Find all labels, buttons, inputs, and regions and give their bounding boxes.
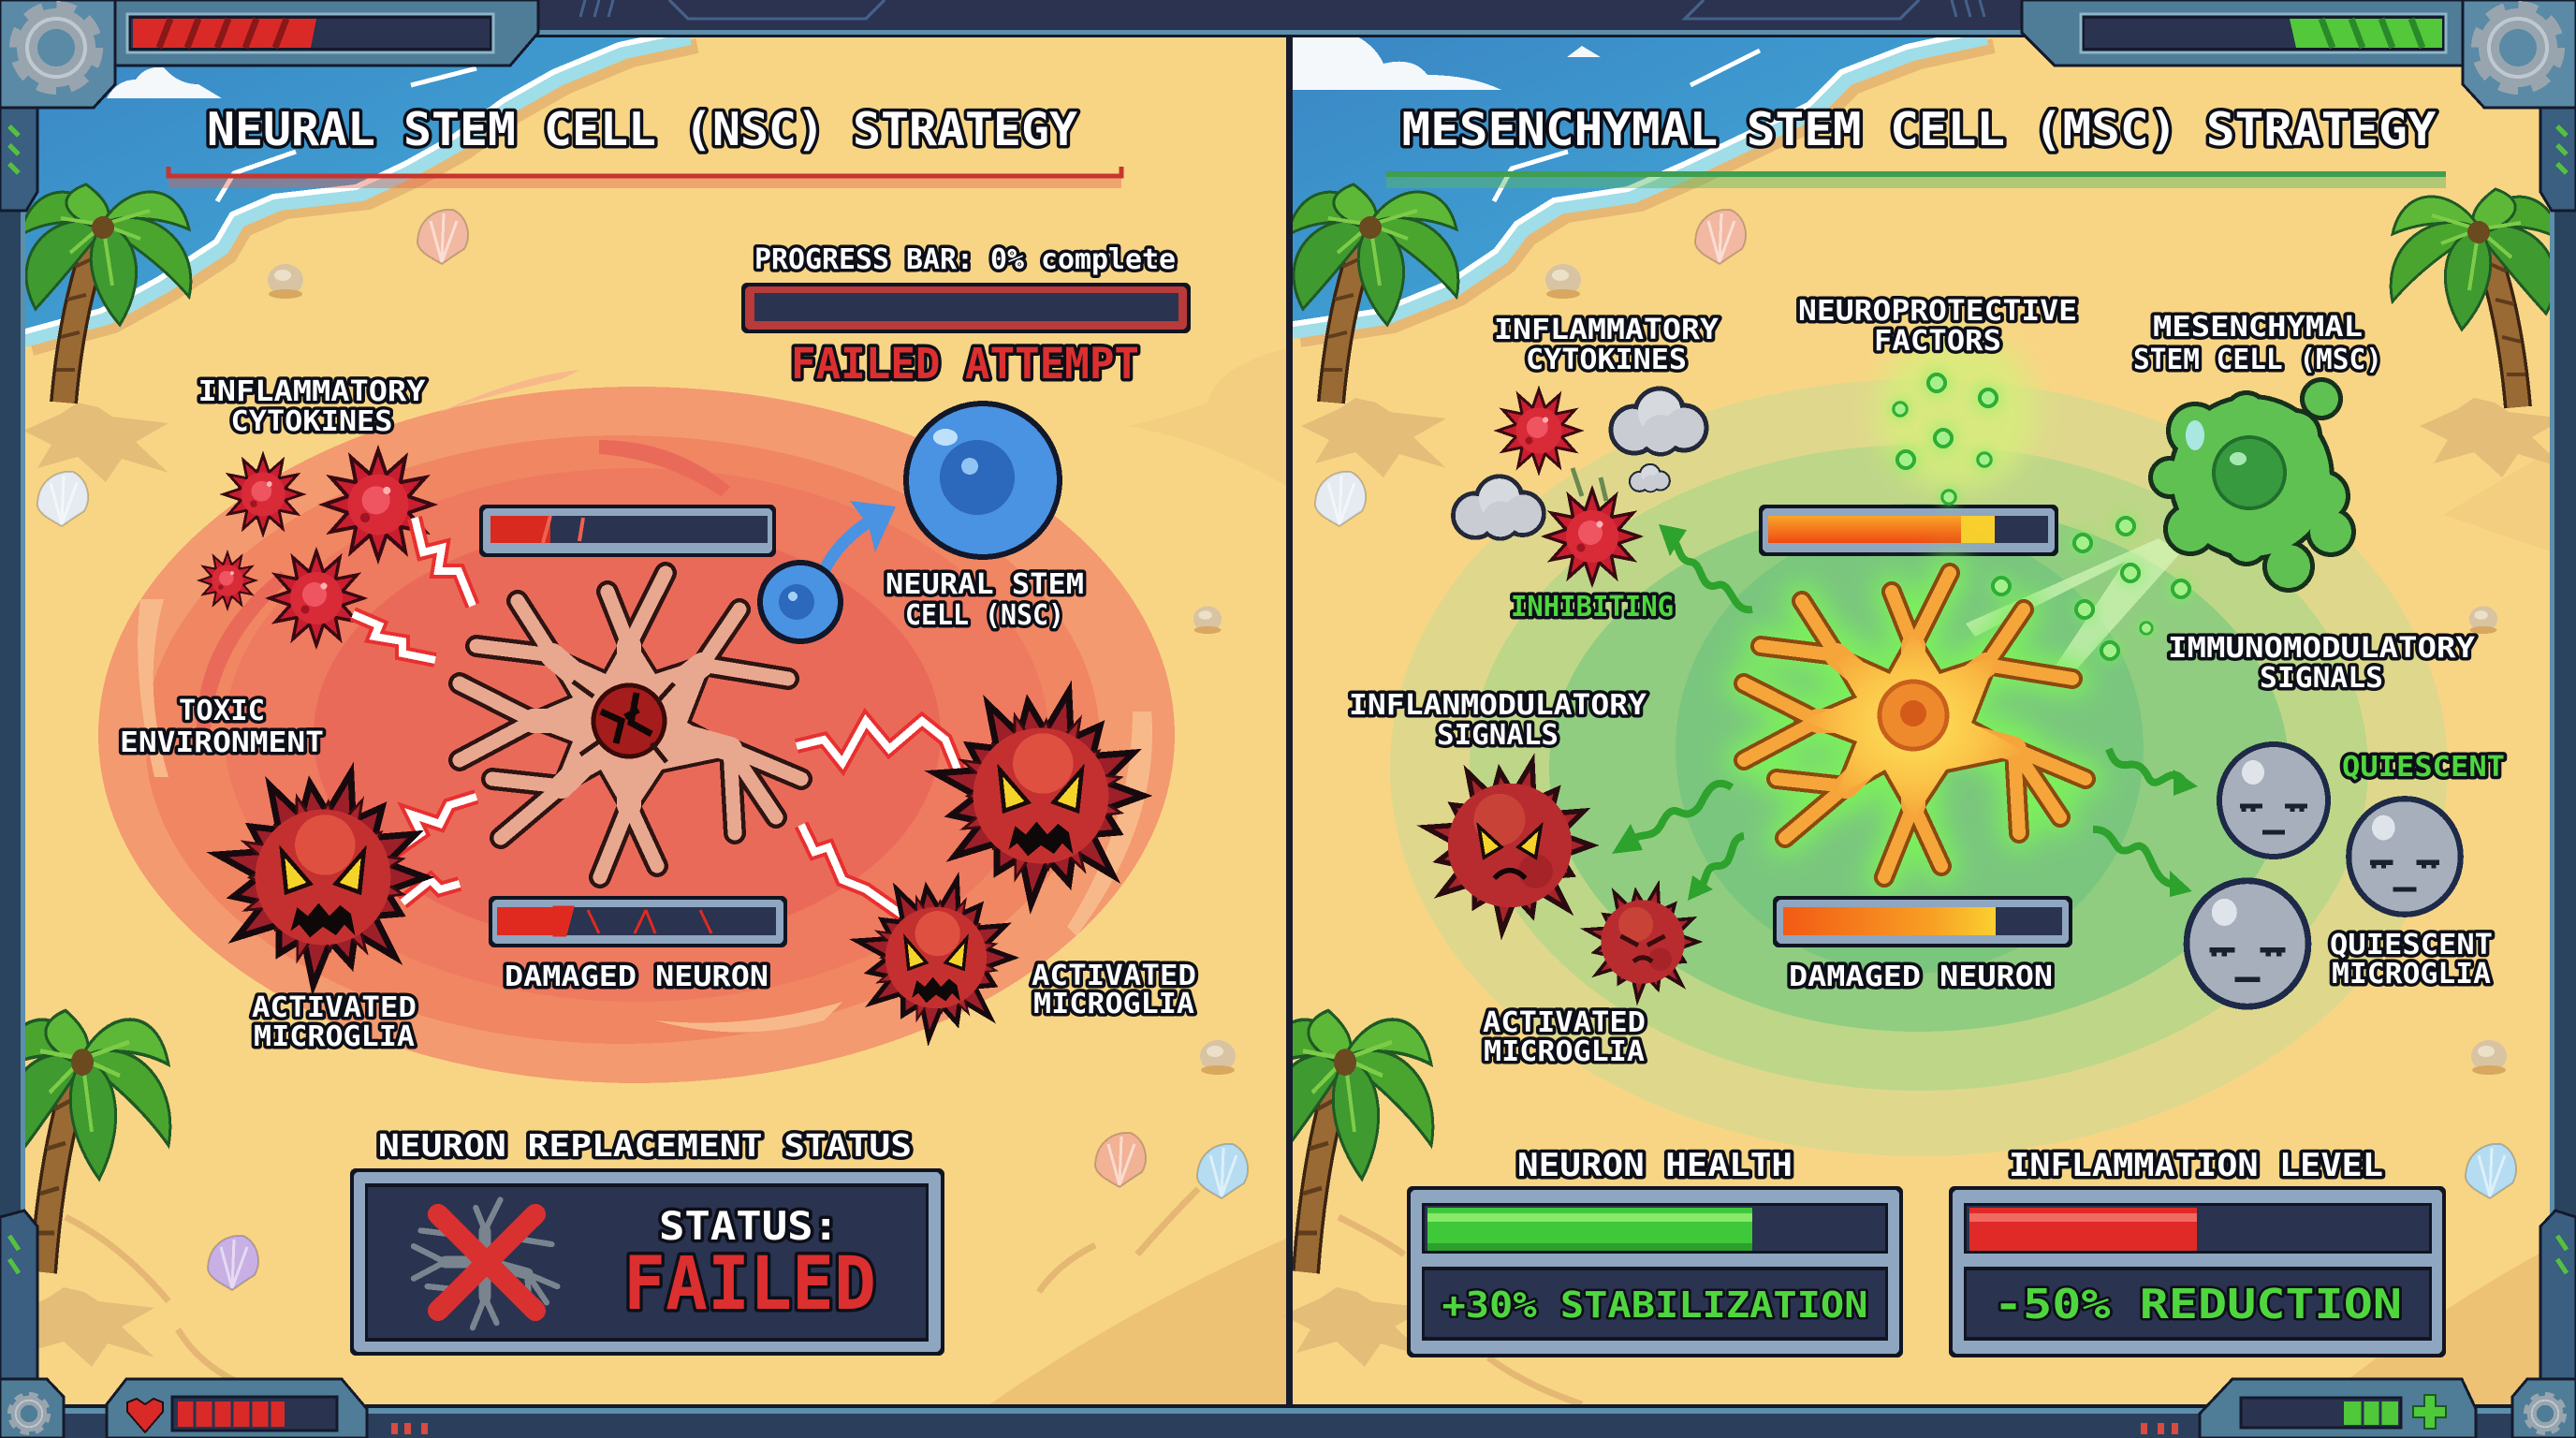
label: inflanmodulatory signals [1349,689,1647,752]
label: activated microglia left: MICROGLIA [254,1020,415,1053]
label: toxic environment [120,695,324,759]
label: activated microglia [1483,1006,1646,1068]
label: inflanmodulatory signals: INFLANMODULATORY [1349,689,1647,722]
arrow and small stem cell [760,501,896,641]
title: MSC: MESENCHYMAL STEM CELL (MSC) STRATEGY [1402,103,2437,156]
label: immunomodulatory signals: SIGNALS [2260,662,2383,695]
frame: left rail [0,106,37,1407]
label: inflammatory cytokines [1494,314,1719,376]
dunes: left beach [66,348,1288,1407]
title: NSC: NEURAL STEM CELL (NSC) STRATEGY [207,103,1078,156]
label: neural stem cell: CELL (NSC) [905,599,1064,632]
label: neuroprotective factors [1798,295,2077,358]
label: toxic environment: TOXIC [179,695,265,727]
panel: MSC strategy scene [1263,31,2565,1407]
label: immunomodulatory signals [2168,632,2475,695]
label: failed attempt: FAILED ATTEMPT [791,339,1139,389]
label: inflammatory cytokines: INFLAMMATORY [198,375,425,408]
palm tree: lower left [0,1010,170,1272]
label: neuroprotective factors: NEUROPROTECTIVE [1798,295,2077,328]
particles: immunomodulatory signals [1987,512,2195,665]
ocean: right beach [1287,31,1994,340]
label: inflanmodulatory signals: SIGNALS [1437,719,1559,752]
title underline: green [1386,171,2446,188]
beams: MSC to neuron [1966,538,2181,683]
panel: inflammation meter [1949,1186,2446,1357]
shells and stones: left beach [37,210,1248,1290]
HUD: top left red meter [115,0,538,66]
panel: neuron health meter [1407,1186,1903,1357]
label: neural stem cell: NEURAL STEM [886,568,1084,601]
icons: quiescent microglia [2187,744,2461,1006]
clouds: right beach [1293,37,1601,90]
health bar: upper damaged [479,505,776,557]
toxic red swirl environment [98,370,1175,1083]
text: failed: FAILED [623,1242,876,1327]
arrowheads: to microglia [1612,824,1713,901]
icon: mesenchymal stem cell [2153,382,2351,588]
label: inflammation level: INFLAMMATION LEVEL [2009,1147,2383,1184]
icon: activated microglia right [935,691,1143,903]
HUD: bottom left health [107,1379,367,1438]
label: inflammatory cytokines [198,375,425,438]
label: neuron replacement status: NEURON REPLACEMENT STATUS [378,1127,912,1164]
icon: activated microglia left [217,772,425,985]
icon: activated microglia small [857,880,1013,1038]
health bar: lower damaged [489,896,787,947]
title underline: red [168,167,1121,188]
shells and stones: right beach [1315,210,2516,1198]
label: inflammatory cytokines: INFLAMMATORY [1494,314,1719,346]
neuron glow [1744,573,2086,877]
palm tree: upper right [2391,189,2561,407]
text: reduction value: -50% REDUCTION [1994,1281,2402,1328]
panel: NSC strategy scene [0,31,1288,1407]
health bar: neuron upper [1759,505,2058,556]
arrows: signals to quiescent [2093,749,2186,885]
arrowheads: to quiescent [2170,770,2198,897]
label: mesenchymal stem cell [2133,311,2382,376]
HUD: bottom right green meter [2200,1379,2476,1438]
health bar: neuron lower [1773,896,2072,947]
cloud: left beach [107,67,222,98]
label: neuron health: NEURON HEALTH [1517,1147,1793,1184]
panel: status failed [350,1168,944,1356]
icon: red X [438,1214,535,1311]
label: progress bar: PROGRESS BAR: 0% complete [754,243,1176,276]
particles: neuroprotective factors [1889,369,2002,508]
text: status: STATUS: [659,1203,839,1249]
label: neural stem cell [886,568,1084,632]
dunes: right beach [1339,449,2553,1407]
HUD: top right gear box [2463,0,2576,108]
label: toxic environment: ENVIRONMENT [120,726,324,759]
label: activated microglia left [252,991,417,1053]
central divider [1286,34,1293,1410]
label: mesenchymal stem cell: MESENCHYMAL [2153,311,2363,344]
label: mesenchymal stem cell: STEM CELL (MSC) [2133,344,2382,376]
label: quiescent: QUIESCENT [2342,751,2505,784]
label: activated microglia: MICROGLIA [1484,1035,1645,1068]
label: quiescent microglia: MICROGLIA [2332,958,2491,990]
green healing aura [1390,332,2448,1156]
arrow: inhibiting squiggle [1659,524,1752,609]
frame: right rail [2540,106,2576,1407]
label: activated microglia right [1032,960,1196,1020]
icon: calming microglia large [1426,762,1591,932]
label: damaged neuron: DAMAGED NEURON [1789,961,2053,993]
HUD: top right green meter [2022,0,2463,66]
text: stabilization value: +30% STABILIZATION [1442,1284,1868,1326]
icon: damaged neuron [460,573,801,877]
shadow: palm [23,403,168,482]
icon: recovering neuron [1744,573,2086,877]
HUD: top left gear box [0,0,115,108]
shadows: right palms [1282,398,2565,1367]
icon: calming microglia small [1586,886,1698,1000]
icons: inflammatory cytokines [199,450,432,645]
palm tree: upper left of right panel [1288,184,1458,403]
label: neuroprotective factors: FACTORS [1874,325,2001,358]
icon: faded neuron [414,1200,557,1328]
icons: cytokines and clouds [1453,389,1706,583]
label: activated microglia right: ACTIVATED [1032,960,1196,992]
frame: bottom bar [0,1404,2576,1438]
label: quiescent microglia: QUIESCENT [2330,929,2493,961]
label: inhibiting: INHIBITING [1511,591,1674,624]
progress bar: 0 percent [741,283,1191,333]
shadow: lower palm [9,1287,154,1367]
arrows: signals to microglia [1627,784,1744,889]
label: activated microglia right: MICROGLIA [1033,988,1194,1020]
frame: top bar [524,0,2041,37]
palm tree: upper left [21,184,191,403]
label: quiescent microglia [2330,929,2493,990]
label: activated microglia: ACTIVATED [1483,1006,1646,1039]
label: immunomodulatory signals: IMMUNOMODULATORY [2168,632,2475,665]
ocean: left beach [19,31,697,348]
label: inflammatory cytokines: CYTOKINES [1526,344,1687,376]
label: damaged neuron: DAMAGED NEURON [505,961,768,993]
icon: neural stem cell [906,404,1060,557]
label: activated microglia left: ACTIVATED [252,991,417,1024]
palm tree: lower left of right panel [1293,1009,1434,1273]
HUD: bottom right gear [2512,1379,2576,1438]
label: inflammatory cytokines: CYTOKINES [230,405,393,438]
lightning bolts [353,518,961,916]
HUD: bottom left gear [0,1379,64,1438]
